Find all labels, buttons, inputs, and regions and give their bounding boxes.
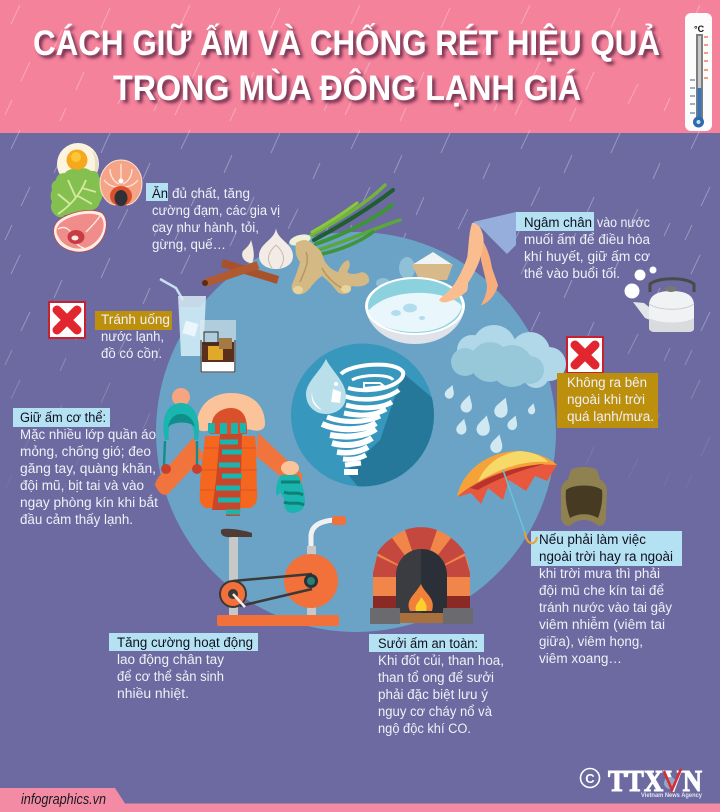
text: working outside: viêm nhiễm (viêm tai [539, 616, 665, 633]
icon: ham [54, 210, 106, 252]
text: foot soak: khí huyết, giữ ấm cơ [524, 249, 650, 265]
copyright symbol: C [585, 771, 595, 786]
icon: forbidden mark, drinks [49, 302, 85, 338]
text: avoid cold drinks: nước lạnh, [101, 329, 164, 345]
text: eat: Ăn [152, 185, 168, 202]
text: safe heating: ngộ độc khí CO. [378, 721, 471, 737]
text: keep body warm: Giữ ấm cơ thể: [20, 410, 106, 426]
icon: thermometer [685, 13, 712, 131]
icon: whisky glass [200, 320, 236, 373]
copyright symbol [580, 768, 600, 788]
big blue circle [156, 232, 556, 632]
text: safe heating: than tổ ong để sưởi [378, 670, 494, 686]
text: working outside: ngoài trời hay ra ngoài [539, 549, 673, 565]
text: do not go out: quá lạnh/mưa. [567, 409, 654, 425]
text: do not go out: Không ra bên [567, 375, 647, 391]
text: foot soak: thể vào buổi tối. [524, 266, 620, 282]
icon: rain cloud [451, 325, 566, 388]
icon: forbidden mark, going out [567, 337, 603, 373]
text: eat: gừng, quế… [152, 237, 226, 253]
icon: winter coat with scarf [155, 393, 302, 516]
icon: water glass with straw [160, 279, 206, 356]
text: working outside: khi trời mưa thì phải [539, 566, 660, 582]
icon: lettuce [50, 168, 103, 217]
text: increase activity: Tăng cường hoạt động [117, 635, 253, 651]
logo: TTXVN: TTXVN [608, 763, 702, 798]
text: foot soak: muối ấm để điều hòa [524, 232, 650, 248]
text: keep body warm: đầu cảm thấy lạnh. [20, 512, 133, 528]
icon: foot bath bowl [365, 252, 465, 344]
text: increase activity: lao động chân tay [117, 652, 225, 668]
text: avoid cold drinks [95, 311, 172, 362]
text: foot soak: Ngâm chân [524, 215, 592, 231]
logo: TTXVN: Vietnam News Agency [641, 792, 702, 799]
icon: garlic [242, 228, 293, 269]
text: do not go out [557, 373, 658, 428]
text: avoid cold drinks: đồ có cồn. [101, 346, 162, 362]
icon: hat with ear flaps [561, 467, 607, 526]
icon: green onions [288, 185, 400, 262]
text: working outside: đội mũ che kín tai để [539, 583, 664, 599]
icon: earflap hat [161, 388, 202, 474]
text: avoid cold drinks: Tránh uống [101, 312, 170, 328]
text: eat [146, 183, 280, 253]
text: eat: đủ chất, tăng [172, 186, 250, 202]
text: working outside: Nếu phải làm việc [539, 532, 646, 548]
text: working outside [531, 531, 682, 667]
header band [0, 0, 720, 133]
source credit: infographics.vn [21, 792, 106, 808]
icon: thermometer: °C [694, 24, 705, 34]
text: eat: cay như hành, tỏi, [152, 220, 259, 236]
icon: rain drops [443, 383, 537, 454]
title: TRONG MÙA ĐÔNG LẠNH GIÁ [113, 68, 581, 108]
text: safe heating: Sưởi ấm an toàn: [378, 636, 478, 652]
icon: cinnamon sticks [202, 263, 278, 286]
text: foot soak: vào nước [597, 215, 650, 231]
text: keep body warm: đội mũ, bịt tai và vào [20, 478, 144, 494]
icon: mitten [276, 461, 305, 513]
title: CÁCH GIỮ ẤM VÀ CHỐNG RÉT HIỆU QUẢ [33, 23, 660, 63]
title [33, 23, 660, 108]
text: increase activity [109, 633, 258, 702]
icon: fireplace [370, 527, 473, 624]
text: safe heating: nguy cơ cháy nổ và [378, 704, 492, 720]
icon: exercise bike [217, 516, 346, 626]
text: keep body warm [13, 408, 158, 528]
footer band [0, 788, 720, 812]
text: working outside: tránh nước vào tai gây [539, 600, 673, 616]
icon: legs and skirt [439, 212, 516, 305]
text: keep body warm: Mặc nhiều lớp quần áo [20, 427, 156, 443]
text: do not go out: ngoài khi trời [567, 392, 645, 408]
text: keep body warm: găng tay, quàng khăn, [20, 461, 156, 477]
text: keep body warm: mỏng, chống gió; đeo [20, 444, 151, 460]
icon: kettle with steam [624, 266, 694, 332]
icon: egg [57, 143, 99, 185]
text: working outside: giữa), viêm họng, [539, 634, 643, 650]
text: eat: cường đạm, các gia vị [152, 203, 280, 219]
text: keep body warm: ngay phòng kín khi bắt [20, 494, 158, 511]
text: foot soak [516, 212, 650, 282]
text: safe heating: phải đặc biệt lưu ý [378, 687, 489, 703]
text: safe heating [369, 634, 504, 737]
text: increase activity: nhiều nhiệt. [117, 686, 189, 702]
text: safe heating: Khi đốt củi, than hoa, [378, 653, 504, 669]
text: working outside: viêm xoang… [539, 651, 622, 667]
icon: salmon steak [100, 160, 142, 206]
center icon: tornado and water drop [291, 344, 434, 486]
icon: ginger [292, 240, 369, 294]
icon: umbrella [457, 451, 557, 543]
text: increase activity: để cơ thể sản sinh [117, 669, 224, 685]
